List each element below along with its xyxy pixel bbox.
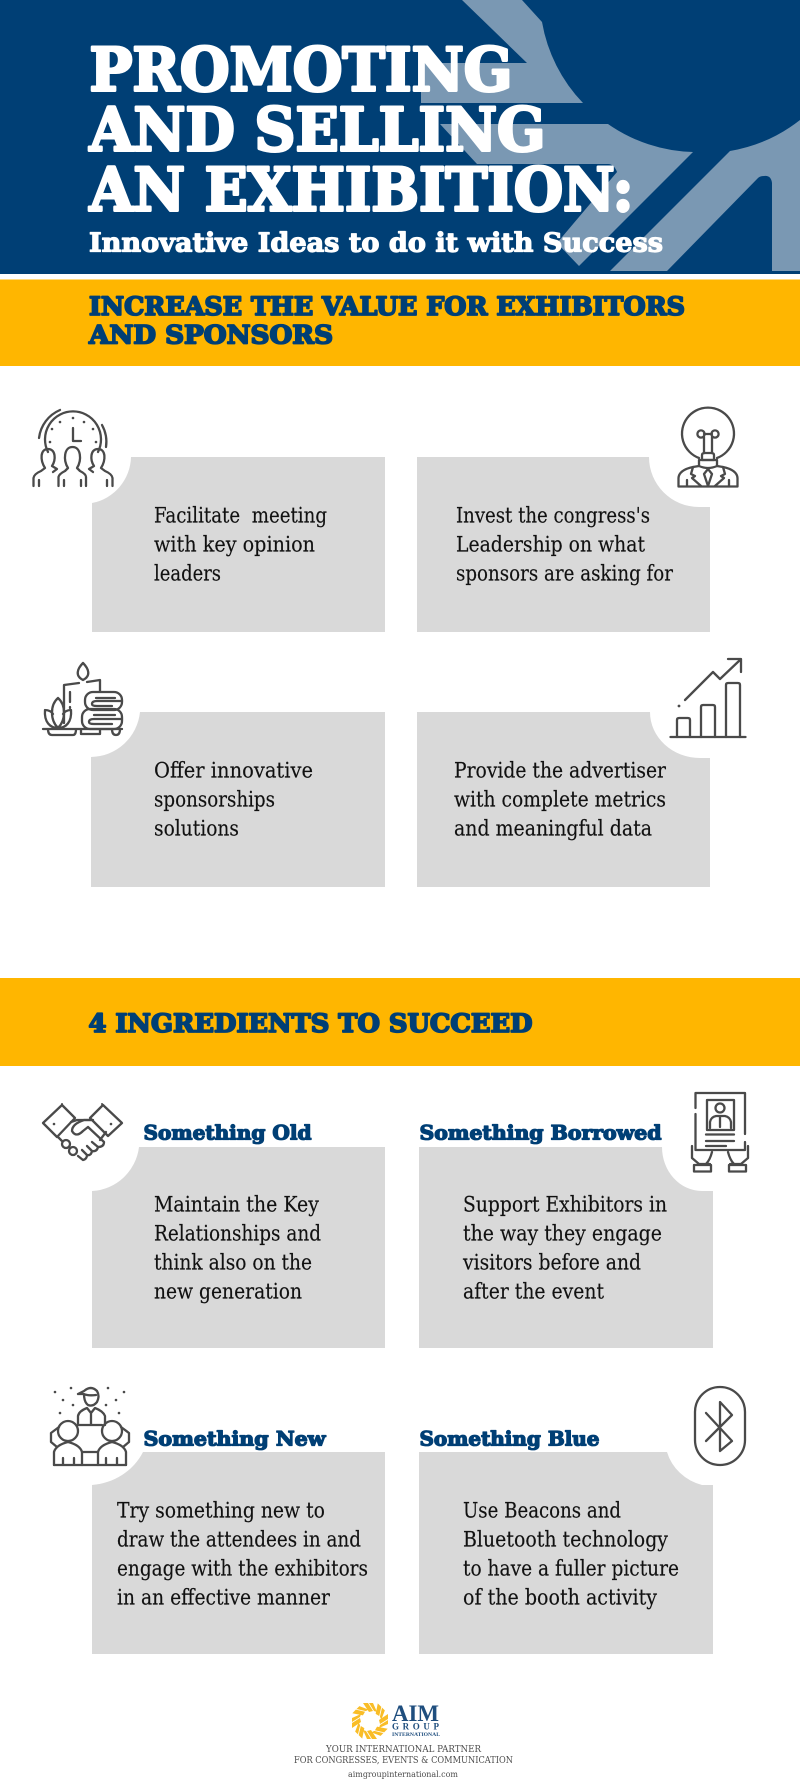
section heading: 4 INGREDIENTS TO SUCCEED (88, 1009, 532, 1038)
card text: sponsorships (154, 788, 275, 812)
card text: Try something new to (117, 1498, 325, 1522)
card text: the way they engage (463, 1222, 662, 1246)
logo: wordmark: INTERNATIONAL (392, 1732, 440, 1738)
card heading: Something Old (144, 1122, 312, 1144)
card text: Relationships and (154, 1222, 321, 1246)
section band: 4 ingredients (0, 978, 800, 1066)
card text: Use Beacons and (463, 1498, 621, 1522)
card text: Facilitate meeting (154, 504, 327, 528)
card text: with complete metrics (454, 788, 666, 812)
card text: leaders (154, 562, 221, 586)
card text: sponsors are asking for (456, 562, 674, 586)
card text (454, 758, 667, 840)
card text: Invest the congress's (456, 504, 650, 528)
card text: Bluetooth technology (463, 1528, 668, 1552)
icon: poster held by hands (692, 1093, 748, 1172)
decorative logo shapes (421, 0, 800, 271)
title: AND SELLING (89, 96, 545, 166)
card heading: Something New (144, 1428, 327, 1450)
card text (154, 504, 327, 586)
card: innovative sponsorships (91, 712, 385, 887)
card text (456, 504, 674, 586)
card: facilitate meeting (92, 457, 385, 632)
logo: sun mark (352, 1703, 388, 1739)
card text: and meaningful data (454, 816, 652, 840)
card text: Offer innovative (154, 758, 313, 782)
card text: of the booth activity (463, 1586, 657, 1610)
card text: new generation (154, 1280, 302, 1304)
card text: visitors before and (462, 1250, 641, 1274)
card text: Support Exhibitors in (463, 1192, 667, 1216)
card text: after the event (463, 1280, 605, 1304)
card: something borrowed (419, 1122, 713, 1348)
card text (154, 758, 313, 840)
section heading (88, 292, 685, 350)
card: something old (92, 1122, 385, 1348)
header banner (0, 0, 800, 274)
tagline: aimgroupinternational.com (348, 1770, 458, 1779)
title: PROMOTING (90, 36, 512, 106)
icon: rising bar chart (670, 659, 746, 737)
footer: logo and tagline (294, 1701, 513, 1779)
card: something new (92, 1428, 385, 1654)
subtitle: Innovative Ideas to do it with Success (89, 228, 663, 258)
card text: engage with the exhibitors (117, 1556, 368, 1580)
card: metrics and data (417, 712, 710, 887)
logo: wordmark: GROUP (392, 1722, 440, 1732)
card heading: Something Borrowed (420, 1122, 662, 1144)
icon: clock and people (34, 410, 112, 486)
icon: lightbulb head businessman (678, 408, 738, 486)
card text: in an effective manner (117, 1586, 331, 1610)
card text: draw the attendees in and (117, 1528, 361, 1552)
card text: Maintain the Key (154, 1192, 319, 1216)
icon: handshake (43, 1103, 122, 1160)
card text: solutions (154, 816, 239, 840)
card text: Leadership on what (456, 532, 645, 556)
card text (117, 1498, 368, 1610)
card text: think also on the (154, 1250, 312, 1274)
tagline: YOUR INTERNATIONAL PARTNER (325, 1744, 482, 1755)
logo: wordmark: AIM (392, 1701, 439, 1726)
section heading: INCREASE THE VALUE FOR EXHIBITORS (89, 292, 685, 321)
title: AN EXHIBITION: (89, 156, 634, 226)
card: invest leadership (417, 457, 710, 632)
section heading: AND SPONSORS (88, 320, 333, 350)
section band: increase the value (0, 280, 800, 366)
card text: to have a fuller picture (463, 1556, 679, 1580)
logo: wordmark (392, 1701, 440, 1738)
icon: presenter and audience (51, 1387, 129, 1465)
card text (154, 1192, 321, 1304)
card text (462, 1192, 667, 1304)
card: something blue (419, 1428, 713, 1654)
icon: candle, towels and leaves (43, 663, 122, 735)
card heading: Something Blue (420, 1428, 600, 1450)
card text: with key opinion (154, 532, 315, 556)
title (89, 36, 633, 226)
card text: Provide the advertiser (454, 758, 667, 782)
tagline (294, 1744, 513, 1779)
tagline: FOR CONGRESSES, EVENTS & COMMUNICATION (294, 1755, 513, 1766)
icon: bluetooth (695, 1387, 745, 1465)
card text (463, 1498, 679, 1610)
